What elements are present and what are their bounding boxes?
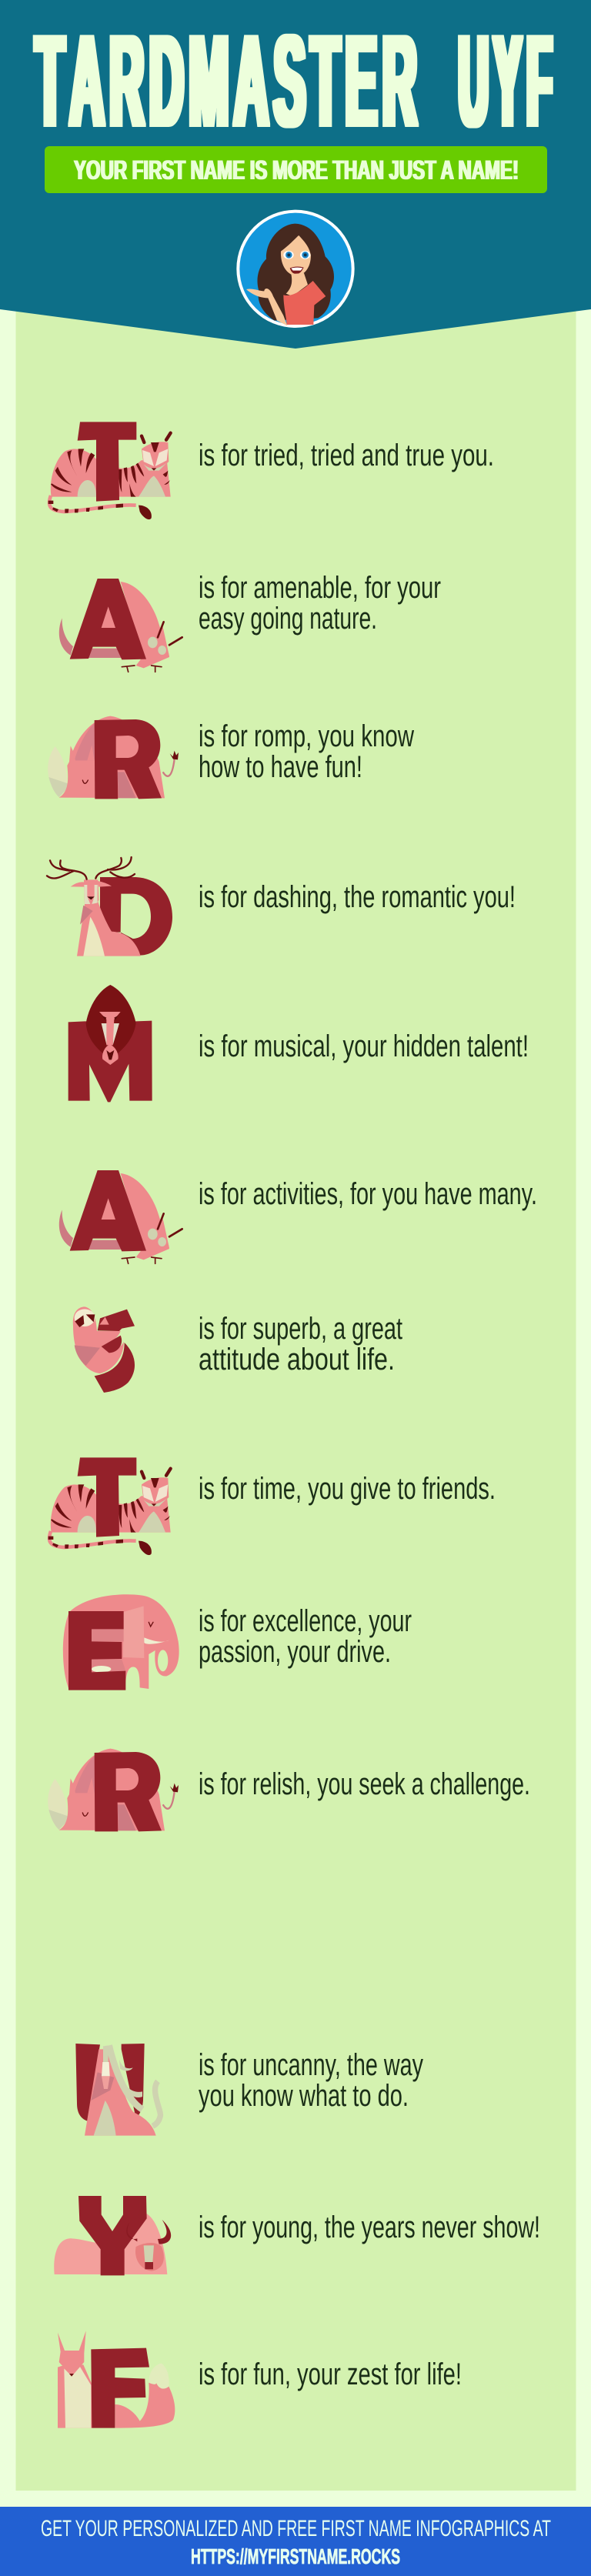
avatar: woman in circle: [236, 210, 355, 328]
text: amenable: easy going nature.: [199, 602, 377, 636]
icon: tiger letter T: [48, 422, 171, 519]
icon: yak letter Y: [54, 2196, 171, 2275]
title: UYF: [459, 9, 557, 153]
subtitle banner: [45, 146, 547, 193]
text: superb: attitude about life.: [199, 1343, 395, 1376]
text: uncanny: is for uncanny, the way: [199, 2048, 423, 2082]
icon: deer letter D: [47, 857, 172, 956]
row: S for superb: [73, 1306, 402, 1393]
text: excellence: passion, your drive.: [199, 1635, 391, 1669]
footer text: url: HTTPS://MYFIRSTNAME.ROCKS: [191, 2544, 400, 2568]
row: M for musical: [68, 985, 529, 1102]
footer: [0, 2507, 591, 2576]
icon: tiger letter T (repeat): [48, 1457, 171, 1555]
text: uncanny: [199, 2048, 423, 2113]
row: F for fun: [58, 2331, 462, 2428]
text: amenable: [199, 571, 441, 636]
row: R for romp: [48, 716, 414, 799]
text: amenable: is for amenable, for your: [199, 571, 441, 605]
row: T for time: [48, 1457, 496, 1555]
icon: elephant letter E: [63, 1594, 179, 1690]
text: tried: is for tried, tried and true you.: [199, 439, 494, 472]
header banner: [0, 0, 591, 349]
text: superb: is for superb, a great: [199, 1312, 402, 1346]
icon: rhino letter R (repeat): [48, 1749, 179, 1831]
row: R for relish: [48, 1749, 530, 1831]
row: T for tried: [48, 422, 494, 519]
icon: fox letter F: [58, 2331, 175, 2428]
row: A for amenable: [59, 571, 441, 672]
row: A for activities: [59, 1170, 537, 1263]
icon: mandrill letter M: [68, 985, 152, 1102]
text: uncanny: you know what to do.: [199, 2079, 409, 2113]
text: superb: [199, 1312, 402, 1376]
text: romp: is for romp, you know: [199, 719, 414, 753]
text: fun: is for fun, your zest for life!: [199, 2357, 462, 2391]
row: D for dashing: [47, 857, 516, 956]
row: Y for young: [54, 2196, 540, 2275]
icon: armadillo letter A (repeat): [59, 1170, 182, 1263]
icon: unicorn letter U: [75, 2044, 160, 2136]
text: romp: [199, 719, 414, 784]
text: romp: how to have fun!: [199, 750, 362, 784]
title: TARDMASTER: [35, 8, 422, 153]
text: excellence: [199, 1604, 412, 1669]
row: U for uncanny: [75, 2044, 423, 2136]
icon: sloth letter S: [73, 1306, 135, 1393]
row: E for excellence: [63, 1594, 412, 1690]
icon: rhino letter R: [48, 716, 179, 799]
icon: armadillo letter A: [59, 579, 182, 672]
text: excellence: is for excellence, your: [199, 1604, 412, 1638]
